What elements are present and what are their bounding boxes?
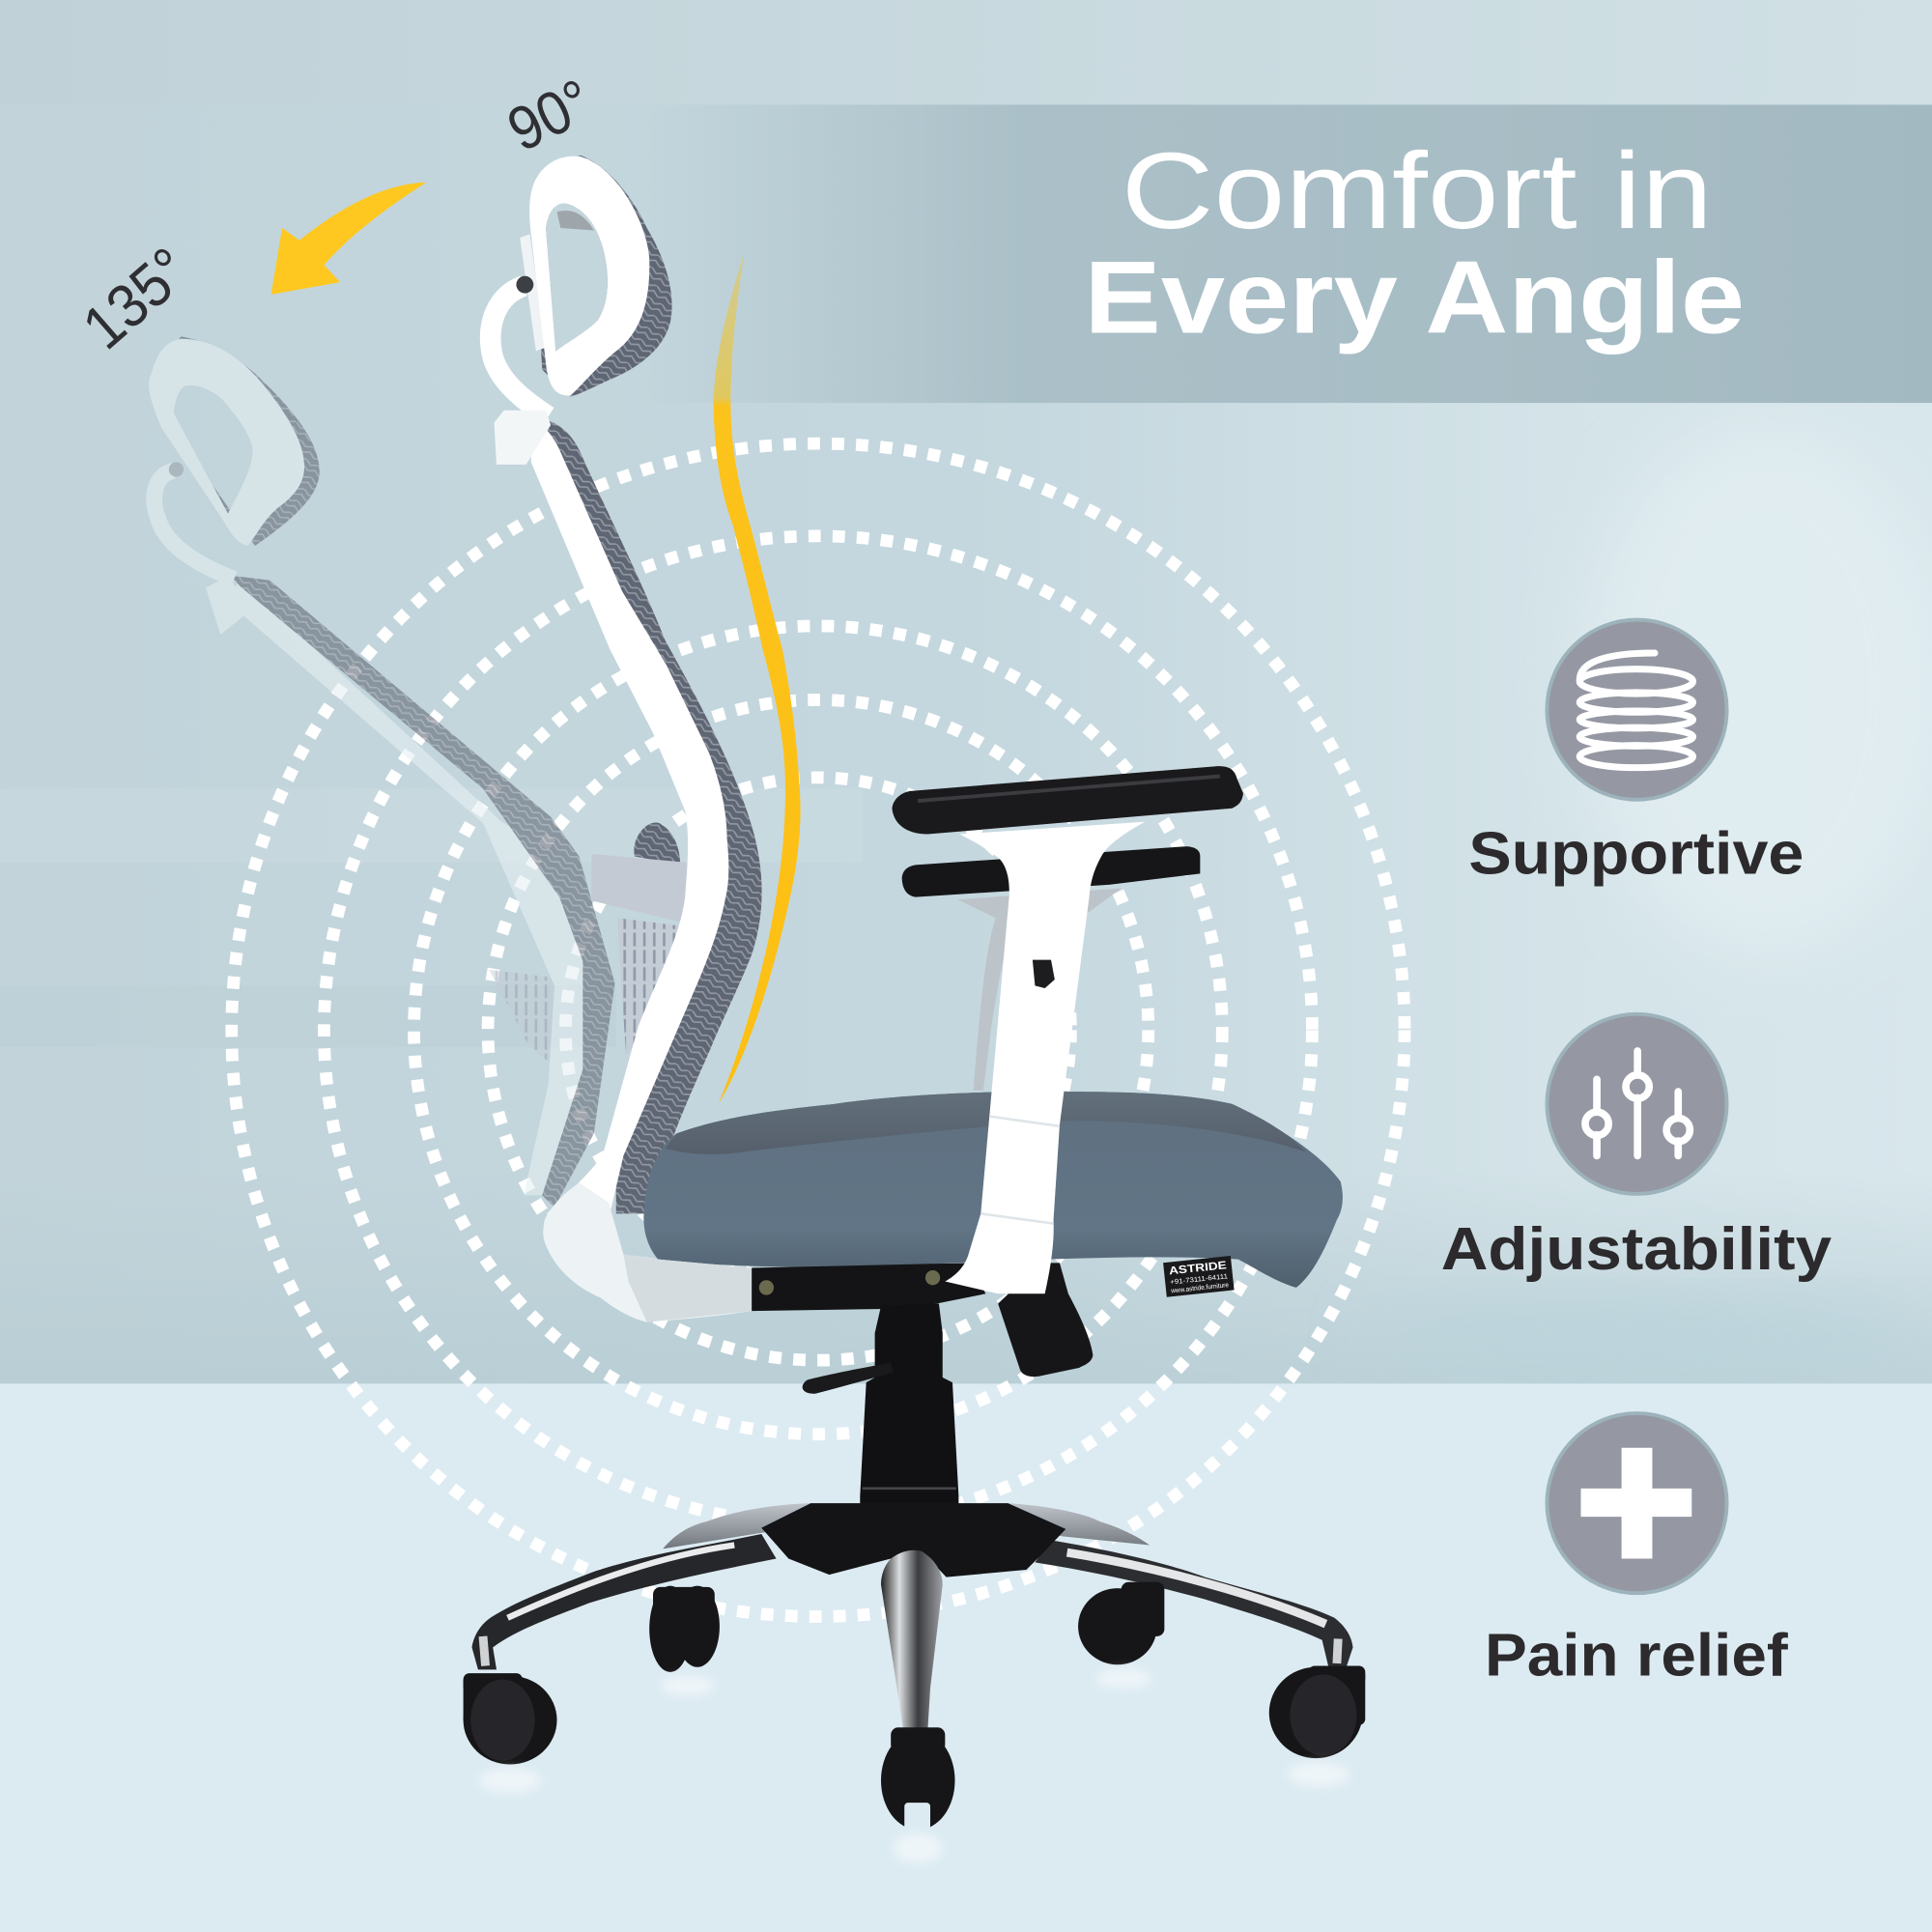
headrest white pad xyxy=(529,156,649,396)
right base leg xyxy=(1035,1540,1353,1665)
centre caster xyxy=(881,1727,955,1833)
label: supportive: Supportive xyxy=(1468,819,1804,887)
seat tag xyxy=(1163,1256,1235,1297)
white arm post xyxy=(945,822,1145,1293)
column collar xyxy=(863,1488,956,1490)
rear right caster xyxy=(1078,1582,1164,1664)
ghost grill xyxy=(489,970,559,1069)
yellow spine curve xyxy=(714,252,801,1104)
armrest highlight xyxy=(918,777,1220,801)
ghost headrest pad xyxy=(149,339,304,546)
lumbar grill xyxy=(617,918,685,1055)
seat tag: ASTRIDE xyxy=(1169,1260,1228,1277)
ghost connector xyxy=(206,576,245,635)
under seat mechanism xyxy=(752,1263,985,1311)
arm height button xyxy=(1033,960,1055,988)
rear arm support xyxy=(957,889,1122,1091)
dotted concentric rings xyxy=(232,443,1405,1616)
icon: spring xyxy=(1547,620,1727,800)
ghost mesh xyxy=(231,576,614,1208)
ghost headrest mesh xyxy=(154,336,320,546)
headrest bolt xyxy=(516,276,533,294)
title line 1: Comfort in xyxy=(1122,129,1713,251)
angle label: 90 degrees: 90° xyxy=(497,66,603,164)
chair xyxy=(464,416,1365,1863)
arm collar line xyxy=(980,1117,1060,1224)
left base leg xyxy=(472,1534,777,1669)
lumbar support behind the back xyxy=(591,823,688,1055)
headrest connector xyxy=(494,411,551,465)
chair back white frame xyxy=(531,417,728,1233)
seat tag: www.astride.furniture xyxy=(1170,1282,1229,1295)
height adjust knob xyxy=(998,1263,1093,1377)
lumbar bar xyxy=(591,854,688,923)
ghost bolt xyxy=(169,462,184,477)
right front caster xyxy=(1269,1665,1365,1758)
rear armrest pad xyxy=(902,846,1200,897)
seat cushion xyxy=(643,1092,1343,1288)
front armrest pad xyxy=(892,766,1243,835)
gas lift column xyxy=(860,1303,958,1511)
left front caster xyxy=(464,1673,557,1765)
title banner xyxy=(0,0,1932,403)
arrow: recline direction xyxy=(271,183,426,295)
title line 2: Every Angle xyxy=(1084,239,1745,355)
seat tag: +91-73111-64111 xyxy=(1170,1273,1228,1287)
base hub xyxy=(761,1503,1065,1577)
ghost frame band xyxy=(225,581,604,1195)
height lever xyxy=(803,1363,894,1394)
mechanism bolts xyxy=(759,1270,940,1295)
feature: pain relief xyxy=(1485,1413,1788,1690)
headrest at 90 degrees xyxy=(491,156,672,465)
ghost chair back at 135 degrees xyxy=(149,336,614,1208)
casters xyxy=(464,1582,1365,1833)
label: adjustability: Adjustability xyxy=(1441,1215,1832,1283)
headrest plate xyxy=(520,234,546,352)
headrest inner bracket xyxy=(557,211,594,231)
angle label: 135 degrees: 135° xyxy=(70,234,203,362)
headrest arm xyxy=(491,286,549,416)
rear left caster xyxy=(649,1586,720,1672)
lumbar fan xyxy=(634,823,680,865)
caster reflections xyxy=(479,1668,1350,1863)
seat top panel xyxy=(666,1092,1306,1154)
feature: supportive xyxy=(1468,620,1804,887)
label: pain relief: Pain relief xyxy=(1485,1622,1788,1690)
rear base legs xyxy=(663,1503,1150,1548)
icon: sliders xyxy=(1547,1014,1727,1194)
headrest mesh xyxy=(533,156,672,397)
icon: plus xyxy=(1547,1413,1727,1593)
ghost headrest arm xyxy=(155,470,234,579)
feature: adjustability xyxy=(1441,1014,1832,1283)
chair back mesh xyxy=(532,416,762,1213)
white seat carrier xyxy=(543,1182,752,1322)
front base leg xyxy=(881,1550,943,1729)
